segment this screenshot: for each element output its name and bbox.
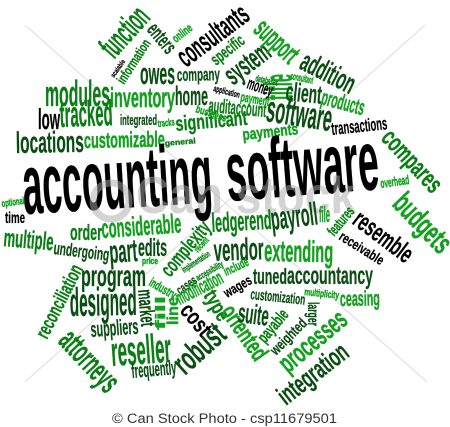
word cloud: top right: application <box>212 83 241 100</box>
word cloud: top left: enters <box>142 18 181 58</box>
word cloud: left middle: optional <box>1 196 25 210</box>
word cloud: top right: databases <box>255 73 279 88</box>
word cloud: left middle: time <box>5 210 25 227</box>
word cloud: left middle: reconciliation <box>32 261 88 342</box>
word cloud: bottom <box>52 267 380 411</box>
word cloud: bottom: reseller <box>109 325 172 375</box>
word cloud: top left <box>16 0 256 160</box>
word cloud: left middle: recent <box>192 235 211 254</box>
word cloud: left middle: multiple <box>2 224 55 256</box>
word cloud: bottom: cases <box>173 273 200 297</box>
word cloud: top left: general <box>164 136 196 148</box>
word cloud: bottom: cost <box>175 298 218 341</box>
word cloud: top right: payments <box>242 121 299 144</box>
word cloud: bottom: suite <box>236 297 271 332</box>
word cloud: top left: owes <box>140 56 175 91</box>
word cloud: left middle: part <box>108 232 139 270</box>
word cloud: top left: specific <box>207 31 248 69</box>
word cloud: left middle <box>1 196 255 342</box>
word cloud: bottom: industry <box>146 275 179 302</box>
word cloud: top left: integrated <box>120 112 157 129</box>
word cloud: right: extending <box>264 235 333 269</box>
word cloud: top left: company <box>177 64 220 85</box>
word cloud: bottom: frequently <box>131 357 178 383</box>
word cloud: left middle: wages <box>220 272 255 301</box>
word cloud: right <box>211 172 450 290</box>
word cloud: top right: software <box>264 88 335 139</box>
word cloud: right: receivable <box>336 228 387 268</box>
word cloud: top left: tracked <box>59 92 113 135</box>
word cloud: top right: addition <box>295 46 361 101</box>
word cloud: top left: modules <box>45 73 110 114</box>
watermark cross lines <box>25 25 427 382</box>
word cloud: top left: inventory <box>110 82 175 113</box>
word cloud: left middle: implementation <box>180 249 212 275</box>
word cloud: bottom: processes <box>272 303 353 379</box>
word cloud: top right: payment <box>239 89 271 109</box>
word cloud: top left: customizable <box>84 127 165 153</box>
word cloud: top left: tracks <box>157 117 175 130</box>
word cloud: right: vendor <box>213 231 264 268</box>
word cloud: left middle: price <box>142 256 158 266</box>
word cloud: bottom: market <box>133 288 159 327</box>
word cloud: top right: money <box>245 74 276 100</box>
word cloud: top right: transactions <box>330 113 388 139</box>
word cloud: top right: auditaccount <box>208 95 267 122</box>
word cloud: top left: scalable <box>110 59 127 79</box>
word cloud: left middle: considerable <box>100 208 182 244</box>
word cloud: top right <box>194 13 449 199</box>
word cloud: top left: low <box>38 104 60 136</box>
word cloud: right: payroll <box>268 195 320 237</box>
word cloud: right: accountancy <box>287 262 373 290</box>
word cloud: bottom: modification <box>172 267 227 309</box>
word cloud: bottom: designed <box>69 280 137 325</box>
word cloud: top left: online <box>169 21 195 45</box>
footer credit: © Can Stock Photo - csp11679501 <box>112 411 337 426</box>
word cloud: top left: locations <box>16 126 84 160</box>
word cloud: bottom: integration <box>271 337 354 411</box>
word cloud: bottom: customization <box>250 286 306 309</box>
word cloud: bottom: ceasing <box>340 287 380 311</box>
word cloud: left middle: include <box>221 254 251 279</box>
watermark: canstock logo: Can stock <box>136 167 356 225</box>
word cloud: right: features <box>324 203 358 240</box>
word cloud: left middle: undergoing <box>53 238 111 265</box>
word cloud: left middle: accessibility <box>194 259 225 283</box>
word cloud: bottom: robust <box>165 315 233 381</box>
word cloud: bottom: type <box>199 286 235 325</box>
word cloud: top left: information <box>113 36 154 87</box>
word cloud: top right: consultant <box>289 71 314 87</box>
word cloud: right: ledgerend <box>211 205 272 238</box>
word cloud: top right: system <box>218 36 277 92</box>
word cloud: bottom: multiplicity <box>304 287 340 302</box>
word cloud: left middle: edits <box>138 234 167 262</box>
word cloud: top left: home <box>175 81 208 111</box>
word cloud: bottom: suppliers <box>90 314 139 342</box>
word cloud: right: tuned <box>253 264 287 289</box>
word cloud: left middle: order <box>70 220 102 245</box>
word cloud: top left: significant <box>174 107 248 136</box>
word cloud: top right: client <box>284 76 323 110</box>
word cloud: top right: products <box>319 85 368 120</box>
word cloud: bottom: line <box>165 297 182 325</box>
word cloud: left middle: complexity <box>156 216 216 281</box>
word cloud: right: overhead <box>379 172 410 191</box>
word cloud: bottom: payable <box>254 305 292 347</box>
word cloud: top right: business <box>194 103 228 125</box>
word cloud: top right: support <box>247 13 306 70</box>
word cloud: top right: title <box>257 74 301 100</box>
word cloud: bottom: larger <box>304 302 321 326</box>
word cloud: left middle: program <box>81 260 146 293</box>
word cloud: bottom: weighted <box>266 315 311 359</box>
word cloud: bottom: oriented <box>215 299 274 366</box>
word cloud: bottom: fill <box>152 296 168 330</box>
word cloud: right: file <box>319 202 330 227</box>
